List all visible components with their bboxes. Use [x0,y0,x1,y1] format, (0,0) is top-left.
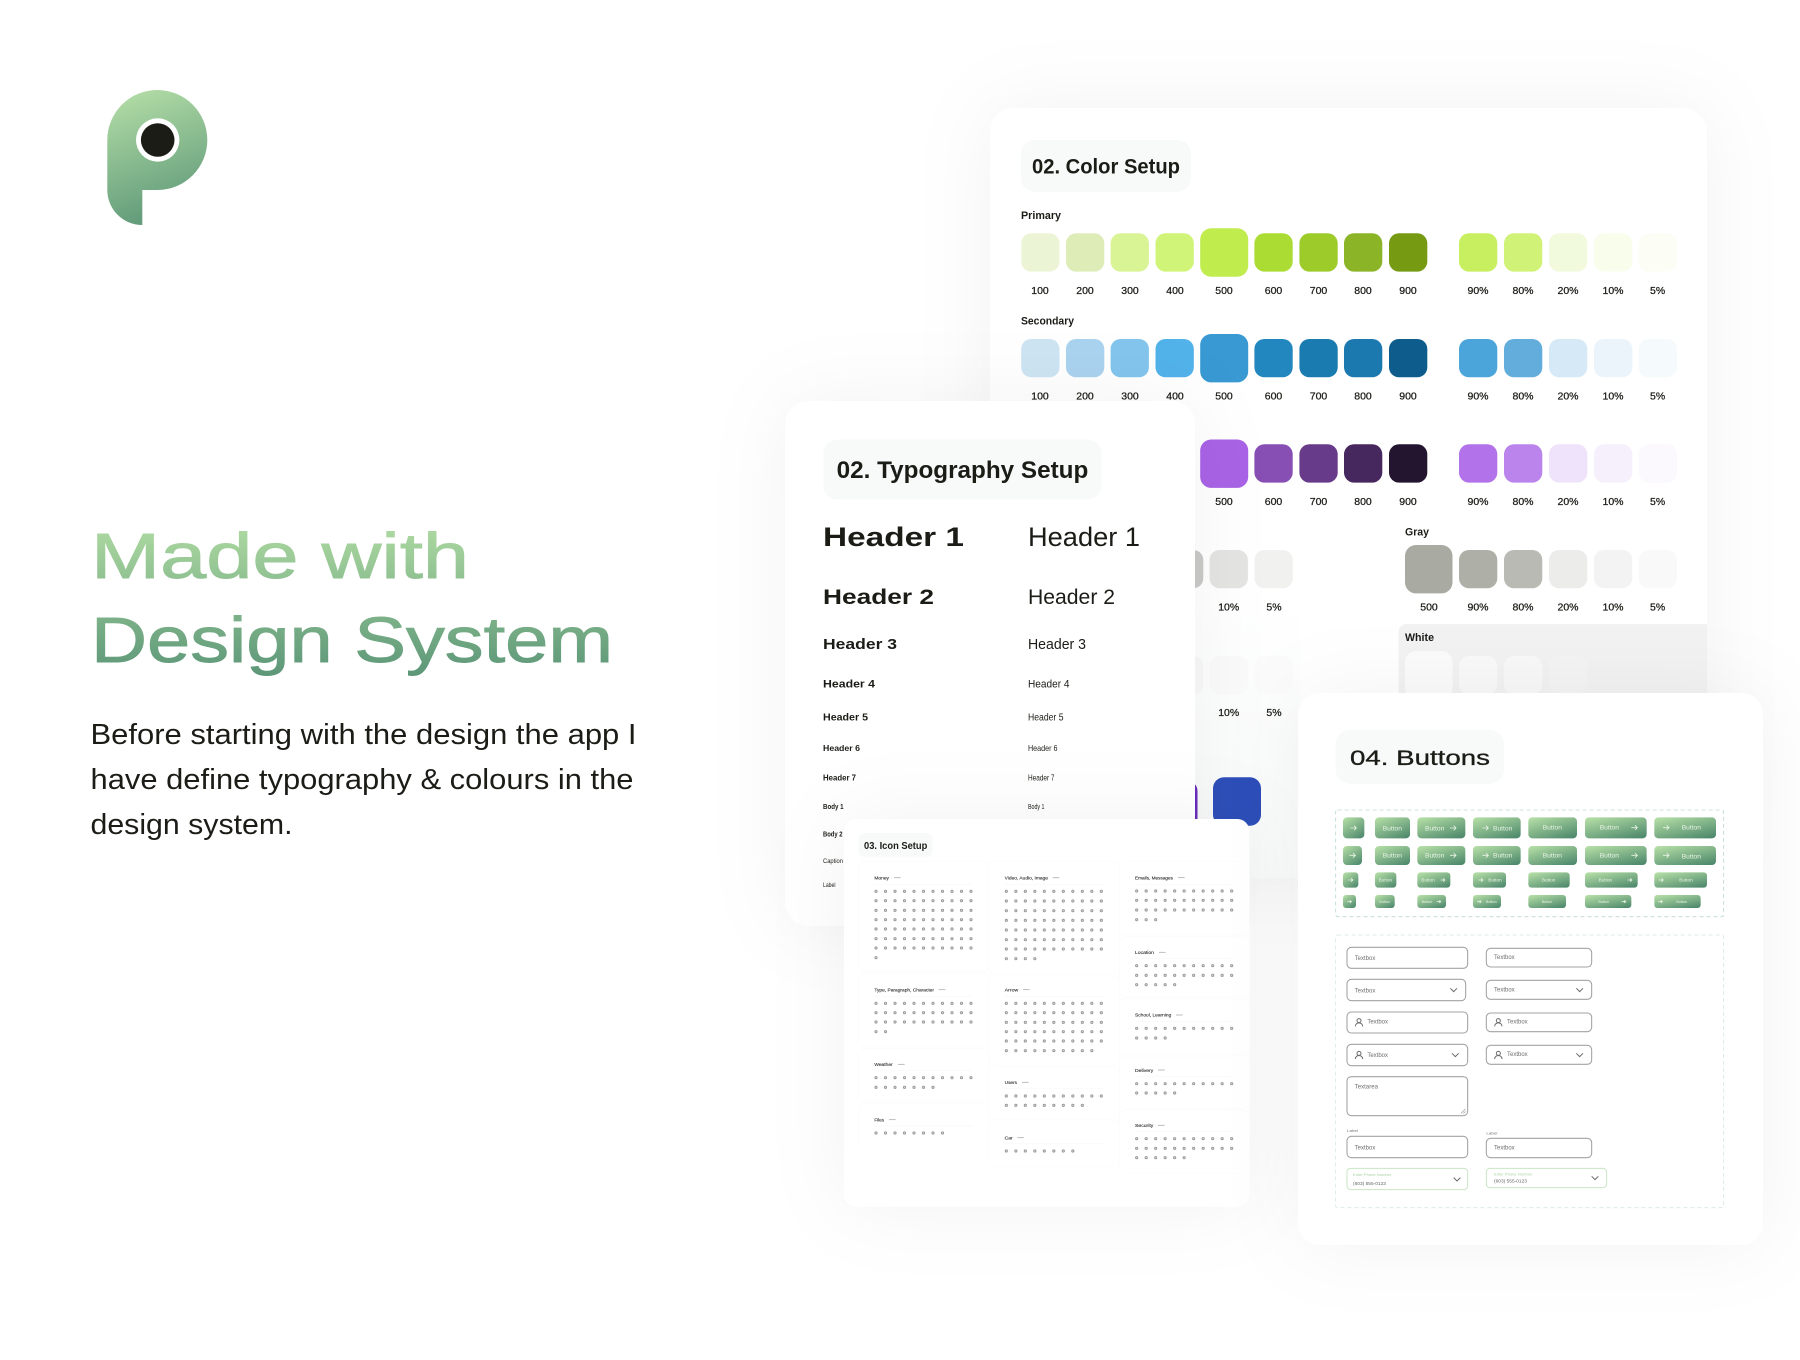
icon heading: 03. Icon Setup [864,840,927,852]
bold type scale: Body 1 [823,802,844,811]
regular type scale: Header 3 [1028,637,1086,653]
dropdown row: Textbox [1355,988,1375,994]
textarea [1347,1077,1468,1116]
primary palette: 300 [1121,285,1139,297]
faint palette partly hidden: 10% [1218,707,1239,719]
purple palette: 10% [1602,496,1624,508]
icon heading [858,833,933,857]
button row 1: Button [1543,825,1562,832]
phone number fields [1347,1168,1607,1190]
neutral palette partly hidden: 10% [1218,601,1239,613]
secondary palette: 5% [1650,390,1665,402]
purple palette [1200,440,1677,508]
labelled textbox row: Label [1486,1131,1498,1135]
body text: have define typography & colours in the [90,764,634,796]
button row 2: Button [1600,853,1619,860]
labelled textbox row: Textbox [1494,1145,1515,1151]
phone number fields: (603) 555-0123 [1353,1181,1386,1187]
primary palette: 900 [1399,285,1417,297]
white palette: White [1405,632,1434,644]
button row 3 [1343,872,1707,888]
dropdown row: Textbox [1494,987,1515,993]
labelled textbox row: Label [1347,1129,1358,1133]
buttons heading [1336,730,1504,784]
primary palette [1021,210,1677,297]
panel: typography setup [785,401,1195,926]
secondary palette: 10% [1602,390,1624,402]
gray palette: 10% [1602,601,1624,613]
panel: color setup [990,108,1707,878]
logo [107,90,207,225]
icon sections [858,862,1249,1173]
gray palette: 5% [1650,601,1665,613]
icons: school, learning [1119,998,1249,1055]
user dropdown row: Textbox [1367,1053,1388,1059]
primary palette: 100 [1031,285,1049,297]
icons: files [858,1103,988,1150]
primary palette: 80% [1512,285,1534,297]
secondary palette: 200 [1076,390,1094,402]
user dropdown row [1347,1044,1592,1066]
regular type scale [1028,522,1140,811]
secondary palette: 100 [1031,390,1049,402]
regular type scale: Body 1 [1028,802,1044,811]
icons: car: Car [1005,1135,1013,1141]
phone number fields: (603) 555-0123 [1494,1179,1527,1185]
icons: video, audio, image [988,862,1119,974]
bold type scale: Header 2 [823,586,934,609]
icons: users [988,1067,1119,1118]
icons: money [858,862,988,972]
labelled textbox row: Textbox [1355,1145,1375,1151]
textbox row 1: Textbox [1494,955,1515,961]
button row 3: Button [1542,878,1556,883]
button row 2: Button [1493,853,1513,860]
primary palette: 5% [1650,285,1665,297]
gray palette: 20% [1557,601,1579,613]
gray palette: Gray [1405,526,1430,538]
button row 4: Button [1486,900,1497,904]
form inputs [1336,935,1724,1208]
white palette [1399,624,1707,710]
gray palette [1405,526,1677,613]
icons: location [1119,937,1249,997]
secondary palette: 500 [1215,390,1233,402]
faint palette partly hidden [1165,656,1293,719]
button row 2: Button [1543,853,1562,860]
button row 3: Button [1421,878,1435,883]
button row 3: Button [1679,878,1693,883]
title: Design System [91,604,613,676]
icons: arrow: Arrow [1005,988,1019,994]
bold type scale: Header 1 [823,522,964,552]
icons: delivery [1119,1057,1249,1108]
button row 4: Button [1542,900,1552,904]
primary palette: 800 [1354,285,1372,297]
body text: Before starting with the design the app I [90,719,636,751]
icons: emails, messages: Emails, Messages [1135,876,1173,882]
secondary palette [1021,316,1677,402]
button row 4: Button [1676,900,1687,904]
icons: emails, messages [1119,862,1249,935]
button row 4: Button [1422,900,1432,904]
user dropdown row: Textbox [1507,1052,1528,1058]
purple palette: 80% [1512,496,1534,508]
dropdown row [1347,979,1592,1001]
purple palette: 500 [1215,496,1233,508]
typography heading: 02. Typography Setup [837,457,1088,484]
body text [90,719,636,841]
button row 1: Button [1383,825,1402,832]
secondary palette: 800 [1354,390,1372,402]
gray palette: 500 [1420,601,1438,613]
gray palette: 90% [1467,601,1489,613]
icons: security [1119,1110,1249,1173]
bold type scale: Header 5 [823,712,868,724]
button row 4 [1343,895,1701,908]
icons: school, learning: School, Learning [1135,1013,1172,1019]
button row 2: Button [1682,853,1701,860]
icons: arrow [988,976,1119,1065]
title [91,520,613,676]
textbox row 1: Textbox [1355,956,1375,962]
bold type scale: Label [823,882,836,889]
neutral palette partly hidden [1165,550,1293,613]
button row 2 [1343,846,1716,865]
labelled textbox row [1347,1129,1592,1158]
gray palette: 80% [1512,601,1534,613]
secondary palette: 400 [1166,390,1184,402]
regular type scale: Header 2 [1028,586,1115,609]
icons: type [858,973,988,1047]
button row 2: Button [1383,853,1402,860]
purple palette: 700 [1310,496,1327,508]
regular type scale: Header 5 [1028,712,1064,724]
button row 1: Button [1600,825,1619,832]
icons: files: Files [874,1117,884,1123]
primary palette: Primary [1021,210,1062,222]
regular type scale: Header 4 [1028,678,1070,690]
button row 1: Button [1425,825,1445,832]
secondary palette: 600 [1265,390,1282,402]
bold type scale: Header 3 [823,637,897,653]
primary palette: 20% [1557,285,1579,297]
blue swatch [1213,777,1261,826]
icons: car [988,1120,1119,1167]
secondary palette: 300 [1121,390,1139,402]
secondary palette: 80% [1512,390,1534,402]
secondary palette: 90% [1467,390,1489,402]
panel: buttons [1298,693,1763,1245]
buttons heading: 04. Buttons [1350,747,1490,770]
icons: type: Type, Paragraph, Character [874,988,934,994]
body text: design system. [90,809,292,841]
primary palette: 500 [1215,285,1233,297]
color heading [1021,140,1191,192]
purple swatch sliver [1170,781,1198,831]
icons: weather [858,1048,988,1102]
user textbox row [1347,1012,1592,1033]
button variants [1336,810,1724,917]
bold type scale: Body 2 [823,831,843,838]
primary palette: 90% [1467,285,1489,297]
bold type scale: Header 4 [823,678,876,690]
faint palette partly hidden: 5% [1266,707,1282,719]
secondary palette: 700 [1310,390,1327,402]
color heading: 02. Color Setup [1032,156,1180,178]
panel: icon setup [844,819,1249,1207]
neutral palette partly hidden: 5% [1266,601,1282,613]
textbox row 1 [1347,947,1592,968]
user textbox row: Textbox [1367,1020,1388,1026]
title: Made with [91,520,469,592]
button row 4: Button [1598,900,1609,904]
secondary palette: Secondary [1021,316,1075,328]
regular type scale: Header 1 [1028,522,1140,552]
icons: security: Security [1135,1123,1154,1129]
bold type scale: Header 6 [823,743,860,753]
icons: users: Users [1005,1080,1017,1086]
purple palette: 800 [1354,496,1372,508]
purple palette: 90% [1467,496,1489,508]
icons: delivery: Delivery [1135,1068,1154,1074]
button row 1 [1343,817,1716,838]
button row 3: Button [1379,878,1392,883]
secondary palette: 20% [1557,390,1579,402]
user textbox row: Textbox [1507,1020,1528,1026]
primary palette: 10% [1602,285,1624,297]
phone number fields: Enter Phone Number [1494,1173,1533,1177]
button row 3: Button [1599,878,1612,883]
icons: location: Location [1135,950,1154,956]
bold type scale: Caption [823,858,843,865]
icons: weather: Weather [874,1062,893,1068]
purple palette: 900 [1399,496,1417,508]
secondary palette: 900 [1399,390,1417,402]
button row 1: Button [1682,825,1701,832]
primary palette: 700 [1310,285,1327,297]
primary palette: 400 [1166,285,1184,297]
primary palette: 600 [1265,285,1282,297]
button row 1: Button [1493,825,1513,832]
bold type scale [823,522,964,889]
icons: money: Money [874,876,889,882]
bold type scale: Header 7 [823,774,857,783]
textarea: Textarea [1355,1084,1379,1090]
regular type scale: Header 6 [1028,743,1058,753]
primary palette: 200 [1076,285,1094,297]
icons: video, audio, image: Video, Audio, Image [1005,876,1048,882]
typography heading [823,440,1102,500]
phone number fields: Enter Phone Number [1353,1173,1392,1177]
regular type scale: Header 7 [1028,774,1055,783]
purple palette: 20% [1557,496,1579,508]
button row 3: Button [1488,878,1502,883]
purple palette: 600 [1265,496,1282,508]
button row 2: Button [1425,853,1445,860]
button row 4: Button [1379,900,1390,904]
purple palette: 5% [1650,496,1665,508]
shaded lower area of color panel [1195,600,1300,878]
